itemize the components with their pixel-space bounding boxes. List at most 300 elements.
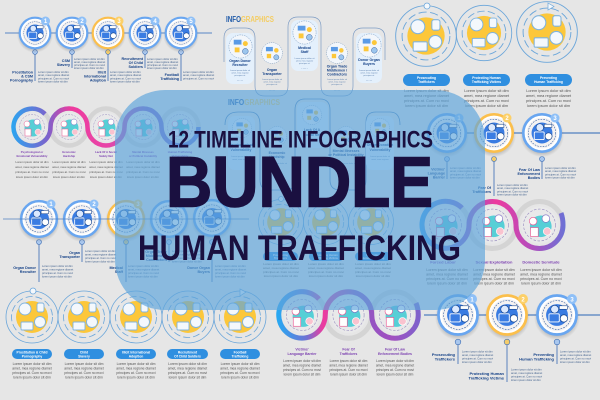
wave labels: principes at. Cum no movi bbox=[126, 170, 160, 174]
timeline step: Organ Transporter bbox=[60, 200, 117, 264]
card 5: Donor Organ Buyers: • • • • • bbox=[366, 80, 372, 82]
wave labels: Emotional Vulnerability bbox=[17, 154, 48, 158]
card: Recruitment Of Child Soldiers: Recruitment bbox=[178, 350, 198, 354]
timeline step: Organ Trade Middlemen: lorem ipsum dolor sit dim bbox=[172, 260, 203, 264]
timeline step: Organ Trade Middlemen: principes at. Cum no movi bbox=[172, 256, 203, 260]
timeline step: Fear Of Law Enforcement Bodies: Enforcement bbox=[517, 172, 541, 176]
panel: middle cards under overlay bbox=[225, 98, 400, 190]
card: Protecting Human Trafficking Victims: Protecting Human bbox=[472, 76, 501, 80]
gradient wave line bbox=[14, 109, 199, 146]
wave body text: amet, mea regione diamet bbox=[283, 364, 321, 368]
wave labels: principes at. Cum no movi bbox=[15, 170, 49, 174]
card: Prosecuting Traffickers bbox=[396, 3, 456, 108]
wave body text: amet, mea regione diamet bbox=[329, 364, 368, 368]
timeline step 2: CSM Slavery: amet, mea regione diamet bbox=[74, 60, 105, 64]
timeline step: Medical Staff: 3 bbox=[136, 202, 140, 208]
cards and text faded: Vulnerability bbox=[231, 148, 251, 152]
wave body text: Lorem ipsum dolor sit dim bbox=[376, 359, 414, 363]
card: Protecting Human Trafficking Victims bbox=[456, 5, 512, 108]
timeline step 5: Football Trafficking: principes at. Cum no movi bbox=[183, 76, 214, 80]
timeline step: Donor Organ Buyers: Donor Organ bbox=[187, 266, 211, 270]
panel: left wave timeline bbox=[14, 108, 198, 179]
timeline step: Prosecuting Traffickers: lorem ipsum dolor sit dim bbox=[462, 360, 493, 364]
timeline step 3: Illicit International Adoption: lorem ipsum dolor sit dim bbox=[110, 80, 141, 84]
timeline step: Organ Trade Middlemen: Lorem ipsum dolor sit dim bbox=[172, 249, 204, 253]
wave labels: Lorem ipsum dolor sit dim bbox=[52, 160, 86, 164]
panel: left timeline middle bbox=[3, 199, 249, 282]
wave icons bbox=[18, 112, 194, 142]
card 5: Donor Organ Buyers: Lorem ipsum dolor sit bbox=[359, 69, 379, 72]
cards and text faded: amet, mea regione bbox=[371, 158, 390, 161]
card: Prosecuting Traffickers: Traffickers bbox=[418, 80, 435, 84]
wave icons bbox=[427, 207, 558, 243]
timeline step: Fear Of Traffickers: lorem ipsum dolor sit dim bbox=[497, 193, 528, 197]
wave body text: Lorem ipsum dolor sit dim bbox=[520, 268, 562, 272]
timeline step: Organ Donor Recruiter: Recruiter bbox=[20, 270, 37, 274]
card 5: Donor Organ Buyers: Buyers bbox=[363, 62, 375, 66]
timeline step 2: CSM Slavery: Lorem ipsum dolor sit dim bbox=[74, 57, 106, 61]
timeline step 3: Illicit International Adoption: principes at. Cum no movi bbox=[110, 76, 141, 80]
timeline step 2: CSM Slavery bbox=[54, 16, 106, 70]
timeline step 3: Illicit International Adoption bbox=[84, 16, 142, 84]
panel: bottom-middle wave timeline bbox=[279, 292, 418, 376]
card 1: Organ Donor Recruiter: Organ Donor bbox=[229, 59, 251, 63]
timeline step: Protecting Human Trafficking Victims: 2 bbox=[521, 298, 525, 304]
timeline step: Fear Of Traffickers: Traffickers bbox=[472, 190, 491, 194]
timeline step 3: Illicit International Adoption: 3 bbox=[117, 19, 121, 25]
timeline step: Organ Donor Recruiter: amet, mea regione diamet bbox=[42, 268, 73, 272]
card outlines faded bbox=[225, 99, 400, 190]
card: Illicit International Adoption: Illicit International bbox=[122, 350, 150, 354]
wave labels: amet, mea regione diamet bbox=[15, 165, 49, 169]
timeline step: Fear Of Traffickers: 2 bbox=[505, 116, 509, 122]
card: Protecting: Protecting Human bbox=[315, 253, 338, 257]
timeline step 4: Recruitment Of Child Soldiers: 4 bbox=[153, 19, 157, 25]
timeline step 4: Recruitment Of Child Soldiers bbox=[121, 16, 179, 70]
wave labels: Psychological or bbox=[21, 150, 44, 154]
card: Prosecuting: amet, mea regione diamet bbox=[263, 266, 299, 270]
timeline step: Preventing Human Trafficking: principes at. Cum no movi bbox=[560, 356, 591, 360]
timeline step: Medical Staff bbox=[105, 200, 160, 282]
cards and text faded: Lack Of A bbox=[304, 128, 321, 132]
card: Child Slavery: Slavery bbox=[78, 354, 90, 358]
card: Prosecuting: Traffickers bbox=[274, 256, 288, 260]
card 2: Organ Transporter: Lorem ipsum dolor sit bbox=[262, 78, 282, 81]
card 3: Medical Staff bbox=[291, 20, 318, 71]
timeline step: Victims' Language Barrier: lorem ipsum dolor sit dim bbox=[450, 176, 481, 180]
timeline step 2: CSM Slavery: CSM bbox=[62, 59, 70, 63]
card: Prosecuting bbox=[258, 196, 304, 278]
timeline step: Fear Of Traffickers: principes at. Cum no movi bbox=[497, 189, 528, 193]
card: Recruitment Of Child Soldiers: principes at. Cum no movi bbox=[168, 371, 207, 375]
timeline step 1: Prostitution and CSM Pornography: 1 bbox=[44, 19, 48, 25]
timeline step: Prosecuting Traffickers: 1 bbox=[470, 298, 474, 304]
wave labels: principes at. Cum no movi bbox=[89, 170, 123, 174]
wave body text: lorem ipsum dolor sit dim bbox=[330, 372, 367, 376]
timeline step: Fear Of Law Enforcement Bodies: 3 bbox=[553, 116, 557, 122]
card 1: Organ Donor Recruiter: amet, mea regione bbox=[231, 72, 250, 74]
wave labels: or Political Instability bbox=[129, 154, 158, 158]
timeline step: Medical Staff: lorem ipsum dolor sit dim bbox=[128, 274, 159, 278]
card: Football Trafficking bbox=[214, 289, 266, 380]
card: Prosecuting Traffickers: Prosecuting bbox=[417, 76, 436, 80]
wave body text: Lorem ipsum dolor sit dim bbox=[426, 268, 468, 272]
wave labels: amet, mea regione diamet bbox=[52, 165, 86, 169]
cards and text faded: Hardship bbox=[269, 155, 285, 159]
wave labels: Mental Illnesses bbox=[132, 150, 154, 154]
timeline step: Fear Of Law Enforcement Bodies bbox=[517, 113, 577, 180]
timeline step: Organ Transporter: lorem ipsum dolor sit dim bbox=[85, 260, 116, 264]
timeline step: Preventing Human Trafficking: Lorem ipsum dolor sit dim bbox=[560, 350, 592, 354]
card: Recruitment Of Child Soldiers: lorem ipsum dolor sit dim bbox=[169, 376, 207, 380]
card 4: Organ Trade Middlemen / Contractors: Organ Trade bbox=[327, 64, 347, 68]
timeline step: Fear Of Law Enforcement Bodies: amet, mea regione diamet bbox=[545, 169, 576, 173]
card: Prostitution and Child Pornography: principes at. Cum no movi bbox=[12, 371, 52, 375]
cards and text faded: Organ Donation bbox=[367, 143, 393, 147]
timeline step 5: Football Trafficking: Lorem ipsum dolor sit dim bbox=[183, 70, 215, 74]
card: Preventing Human Trafficking: Preventing bbox=[540, 76, 557, 80]
timeline step: Organ Donor Recruiter: principes at. Cum no movi bbox=[42, 271, 73, 275]
card 3: Medical Staff: amet, mea regione bbox=[296, 60, 314, 62]
wave body text: lorem ipsum dolor sit dim bbox=[521, 282, 561, 286]
wave labels: Hardship bbox=[63, 154, 75, 158]
wave body text: lorem ipsum dolor sit dim bbox=[427, 282, 467, 286]
timeline step: Organ Donor Recruiter: lorem ipsum dolor sit dim bbox=[42, 274, 73, 278]
timeline step: Organ Donor Recruiter: Organ Donor bbox=[13, 266, 37, 270]
timeline step: Preventing Human Trafficking: Human Trafficking bbox=[519, 356, 555, 362]
card: Prosecuting Traffickers: amet, mea regione diamet bbox=[404, 93, 450, 98]
title block bbox=[138, 126, 461, 268]
cards and text faded: Economic bbox=[269, 151, 285, 155]
cards and text faded: Vulnerability bbox=[370, 148, 390, 152]
card: Preventing Human Trafficking: Lorem ipsum dolor sit dim bbox=[526, 88, 571, 93]
timeline step 1: Prostitution and CSM Pornography: lorem ipsum dolor sit dim bbox=[38, 80, 69, 84]
wave labels: Fear Of Law bbox=[385, 348, 405, 352]
timeline step 1: Prostitution and CSM Pornography: Pornography bbox=[10, 78, 34, 82]
card: Illicit International Adoption: principes at. Cum no movi bbox=[116, 371, 156, 375]
card: Recruitment Of Child Soldiers: Of Child Soldiers bbox=[174, 354, 201, 358]
timeline step 5: Football Trafficking: 5 bbox=[189, 19, 193, 25]
timeline step: Victims' Language Barrier: Language bbox=[428, 172, 445, 176]
timeline step: Organ Trade Middlemen: Organ Trade bbox=[145, 250, 167, 254]
wave body text: principes at. Cum no movi bbox=[520, 277, 562, 281]
card 4: Organ Trade Middlemen / Contractors: amet, mea regione bbox=[328, 80, 347, 84]
card: Preventing: Preventing bbox=[366, 253, 380, 257]
timeline step: Donor Organ Buyers: Lorem ipsum dolor sit dim bbox=[215, 264, 247, 268]
timeline step: Fear Of Law Enforcement Bodies: principes at. Cum no movi bbox=[545, 172, 576, 176]
card: Football Trafficking: Trafficking bbox=[232, 354, 248, 358]
timeline step: Organ Donor Recruiter: Lorem ipsum dolor sit dim bbox=[42, 264, 74, 268]
timeline step 4: Recruitment Of Child Soldiers: Recruitment bbox=[121, 57, 144, 61]
card: Preventing bbox=[348, 199, 394, 278]
timeline step 2: CSM Slavery: lorem ipsum dolor sit dim bbox=[74, 66, 105, 70]
card: Prosecuting: Prosecuting bbox=[273, 253, 288, 257]
card: Prosecuting: principes at. Cum no movi bbox=[263, 270, 299, 274]
timeline step: Protecting Human Trafficking Victims: principes at. Cum no movi bbox=[511, 374, 542, 378]
timeline step: Preventing Human Trafficking: Preventing bbox=[533, 352, 555, 357]
timeline step: Organ Trade Middlemen: amet, mea regione diamet bbox=[172, 252, 203, 256]
timeline step 3: Illicit International Adoption: International bbox=[84, 74, 106, 78]
card 5: Donor Organ Buyers: principes at. bbox=[363, 74, 375, 77]
panel: right timeline upper bbox=[425, 113, 600, 197]
timeline step: Protecting Human Trafficking Victims bbox=[468, 294, 543, 382]
card 4: Organ Trade Middlemen / Contractors bbox=[327, 43, 347, 92]
card 1: Organ Donor Recruiter: • • • • • bbox=[237, 80, 243, 82]
timeline step: Fear Of Law Enforcement Bodies: lorem ipsum dolor sit dim bbox=[545, 176, 576, 180]
timeline step: Protecting Human Trafficking Victims: amet, mea regione diamet bbox=[511, 371, 542, 375]
cards and text faded: Psychological bbox=[229, 143, 253, 147]
card: Illicit International Adoption: amet, mea regione diamet bbox=[116, 366, 156, 370]
timeline step 4: Recruitment Of Child Soldiers: Of Child bbox=[129, 61, 144, 65]
card 2: Organ Transporter bbox=[262, 43, 282, 92]
card outlines bbox=[224, 17, 385, 96]
wave labels: Lack Of A Social bbox=[95, 150, 117, 154]
wave body text: lorem ipsum dolor sit dim bbox=[284, 372, 321, 376]
timeline step 3: Illicit International Adoption: Adoption bbox=[90, 78, 107, 82]
card 4: Organ Trade Middlemen / Contractors: Lorem ipsum dolor sit bbox=[327, 78, 347, 81]
cards and text faded: or Political Instability bbox=[328, 153, 364, 157]
timeline step: Organ Trade Middlemen: Contractors bbox=[146, 258, 167, 262]
card: Preventing: Human Trafficking bbox=[362, 256, 385, 260]
wave labels: Human Trafficking bbox=[168, 150, 192, 154]
wave labels: lorem ipsum dolor sit dim bbox=[53, 175, 86, 179]
timeline step: Medical Staff: Staff bbox=[115, 270, 124, 274]
card 4: Organ Trade Middlemen / Contractors: Middlemen / bbox=[327, 68, 347, 72]
timeline step 1: Prostitution and CSM Pornography bbox=[10, 16, 70, 84]
timeline step 3: Illicit International Adoption: Illicit bbox=[98, 70, 107, 74]
wave labels: Lorem ipsum dolor sit dim bbox=[126, 160, 160, 164]
timeline step: Protecting Human Trafficking Victims: Protecting Human bbox=[470, 371, 505, 376]
timeline thin axis bbox=[3, 218, 249, 220]
timeline step 4: Recruitment Of Child Soldiers: lorem ipsum dolor sit dim bbox=[147, 66, 178, 70]
wave labels: Economic bbox=[62, 150, 76, 154]
wave body text: principes at. Cum no movi bbox=[283, 368, 321, 372]
grey rings bbox=[279, 292, 418, 338]
card 5: Donor Organ Buyers: Donor Organ bbox=[358, 58, 380, 62]
timeline step: Prosecuting Traffickers: amet, mea regione diamet bbox=[462, 353, 493, 357]
panel: right wave timeline bbox=[422, 201, 563, 286]
cards and text faded: Mental Illnesses bbox=[333, 149, 359, 153]
wave labels: Victims' bbox=[295, 348, 309, 352]
timeline step 5: Football Trafficking: Football bbox=[165, 73, 179, 77]
wave labels bbox=[15, 150, 192, 179]
timeline step: Preventing Human Trafficking: 3 bbox=[570, 298, 574, 304]
timeline step 3: Illicit International Adoption: amet, mea regione diamet bbox=[110, 73, 141, 77]
timeline step: Organ Transporter: Lorem ipsum dolor sit dim bbox=[85, 249, 117, 253]
timeline step: Fear Of Law Enforcement Bodies: Fear Of Law bbox=[519, 168, 540, 172]
gradient wave line bbox=[422, 201, 563, 248]
wave labels: Language Barrier bbox=[288, 352, 317, 356]
card: Child Slavery: Child bbox=[80, 350, 88, 354]
timeline step 4: Recruitment Of Child Soldiers: principes at. Cum no movi bbox=[147, 63, 178, 67]
card: Protecting: Lorem ipsum dolor sit dim bbox=[308, 262, 344, 266]
wave body text: Lorem ipsum dolor sit dim bbox=[473, 268, 515, 272]
timeline step: Protecting Human Trafficking Victims: lorem ipsum dolor sit dim bbox=[511, 378, 542, 382]
card: Preventing: lorem ipsum dolor sit dim bbox=[356, 274, 391, 278]
wave body text: principes at. Cum no movi bbox=[376, 368, 414, 372]
card: Protecting: lorem ipsum dolor sit dim bbox=[309, 274, 344, 278]
wave body text: amet, mea regione diamet bbox=[426, 272, 468, 276]
timeline step: Victims' Language Barrier: Lorem ipsum dolor sit dim bbox=[450, 166, 482, 170]
card: Preventing Human Trafficking: Human Trafficking bbox=[534, 80, 563, 84]
cards and text faded: Lorem ipsum dolor sit bbox=[231, 155, 251, 158]
timeline step 5: Football Trafficking bbox=[160, 16, 215, 81]
wave labels: Lorem ipsum dolor sit dim bbox=[15, 160, 49, 164]
grey rings bbox=[14, 108, 198, 146]
timeline step 1: Prostitution and CSM Pornography: Prostitution bbox=[12, 70, 34, 74]
timeline step: Fear Of Traffickers bbox=[472, 113, 529, 197]
timeline step: Victims' Language Barrier: amet, mea regione diamet bbox=[450, 169, 481, 173]
cards and text faded: Lorem ipsum dolor sit bbox=[336, 162, 356, 165]
card: Football Trafficking: Lorem ipsum dolor sit dim bbox=[221, 362, 260, 366]
timeline step: Preventing Human Trafficking: lorem ipsum dolor sit dim bbox=[560, 360, 591, 364]
cards and text faded: Social Net bbox=[304, 133, 321, 137]
timeline step: Organ Trade Middlemen bbox=[145, 200, 204, 264]
card: Child Slavery: lorem ipsum dolor sit dim bbox=[65, 376, 103, 380]
card 3: Medical Staff: Lorem ipsum dolor sit bbox=[295, 57, 315, 60]
timeline step: Organ Donor Recruiter: 1 bbox=[49, 202, 53, 208]
card: Prostitution and Child Pornography: amet, mea regione diamet bbox=[12, 366, 52, 370]
card: Child Slavery: Lorem ipsum dolor sit dim bbox=[65, 362, 104, 366]
card: Preventing: amet, mea regione diamet bbox=[355, 266, 391, 270]
timeline step: Victims' Language Barrier: 1 bbox=[457, 116, 461, 122]
timeline step: Organ Transporter: 2 bbox=[92, 202, 96, 208]
card: Football Trafficking: amet, mea regione diamet bbox=[220, 366, 260, 370]
timeline step: Preventing Human Trafficking: amet, mea regione diamet bbox=[560, 353, 591, 357]
card: Protecting: principes at. Cum no movi bbox=[308, 270, 344, 274]
wave labels: lorem ipsum dolor sit dim bbox=[127, 175, 160, 179]
timeline step: Fear Of Law Enforcement Bodies: Bodies bbox=[528, 176, 540, 180]
card: Protecting Human Trafficking Victims: Lorem ipsum dolor sit dim bbox=[464, 88, 509, 93]
panel: top-middle organ trade cards bbox=[224, 15, 385, 96]
timeline step 2: CSM Slavery: Slavery bbox=[57, 63, 71, 67]
cards and text faded: Lorem ipsum dolor sit bbox=[370, 155, 390, 158]
timeline step: Preventing Human Trafficking bbox=[519, 294, 592, 364]
card: Recruitment Of Child Soldiers: Lorem ipsum dolor sit dim bbox=[168, 362, 207, 366]
timeline step 1: Prostitution and CSM Pornography: & CSM bbox=[21, 74, 33, 78]
timeline step 3: Illicit International Adoption: Lorem ipsum dolor sit dim bbox=[110, 70, 142, 74]
timeline step: Medical Staff: Lorem ipsum dolor sit dim bbox=[128, 264, 160, 268]
timeline step 2: CSM Slavery: 2 bbox=[80, 19, 84, 25]
card: Protecting Human Trafficking Victims: amet, mea regione diamet bbox=[464, 93, 510, 98]
card 2: Organ Transporter: principes at. bbox=[266, 83, 278, 86]
panel: bottom-right timeline bbox=[424, 294, 600, 382]
card 5: Donor Organ Buyers: amet, mea regione bbox=[360, 72, 379, 74]
wave body text: lorem ipsum dolor sit dim bbox=[377, 372, 414, 376]
card: Illicit International Adoption: lorem ipsum dolor sit dim bbox=[117, 376, 155, 380]
timeline step: Medical Staff: Medical bbox=[109, 266, 123, 270]
card: Prostitution and Child Pornography: Pornography bbox=[22, 354, 42, 358]
grey rings bbox=[422, 202, 563, 248]
card 4: Organ Trade Middlemen / Contractors: • • • • • bbox=[334, 90, 340, 92]
timeline step: Fear Of Law Enforcement Bodies: Lorem ipsum dolor sit dim bbox=[545, 166, 577, 170]
timeline step: Organ Trade Middlemen: Middlemen / bbox=[146, 254, 167, 258]
card 1: Organ Donor Recruiter: Recruiter bbox=[232, 63, 248, 67]
panel: top-right circular cards bbox=[396, 2, 577, 108]
timeline step: Prosecuting Traffickers: principes at. Cum no movi bbox=[462, 356, 493, 360]
timeline step 1: Prostitution and CSM Pornography: amet, mea regione diamet bbox=[38, 73, 69, 77]
card: Prostitution and Child Pornography: Prostitution & Child bbox=[17, 350, 47, 354]
card: Preventing: principes at. Cum no movi bbox=[355, 270, 391, 274]
card: Illicit International Adoption bbox=[110, 291, 162, 380]
card: Prosecuting Traffickers: lorem ipsum dolor sit dim bbox=[405, 103, 448, 108]
cards and text faded bbox=[228, 102, 394, 170]
card: Preventing Human Trafficking: lorem ipsum dolor sit dim bbox=[527, 103, 570, 108]
wave labels: principes at. Cum no movi bbox=[52, 170, 86, 174]
card: Recruitment Of Child Soldiers: amet, mea regione diamet bbox=[168, 366, 207, 370]
timeline step: Victims' Language Barrier: principes at. Cum no movi bbox=[450, 172, 481, 176]
timeline step: Prosecuting Traffickers: Prosecuting bbox=[432, 352, 456, 357]
card: Protecting: Trafficking Victims bbox=[315, 256, 339, 260]
card: Prosecuting Traffickers: principes at. Cum no movi bbox=[404, 98, 449, 103]
wave labels: lorem ipsum dolor sit dim bbox=[16, 175, 49, 179]
wave body text: principes at. Cum no movi bbox=[426, 277, 468, 281]
card: Child Slavery: principes at. Cum no movi bbox=[64, 371, 104, 375]
timeline step: Organ Donor Recruiter bbox=[13, 200, 74, 282]
wave labels: amet, mea regione diamet bbox=[89, 165, 123, 169]
card 1: Organ Donor Recruiter: Lorem ipsum dolor sit bbox=[230, 69, 250, 72]
timeline step 4: Recruitment Of Child Soldiers: amet, mea regione diamet bbox=[147, 60, 178, 64]
wave labels: Enforcement Bodies bbox=[378, 352, 412, 356]
wave labels: lorem ipsum dolor sit dim bbox=[90, 175, 123, 179]
card: Recruitment Of Child Soldiers bbox=[162, 291, 214, 380]
card: Prosecuting: lorem ipsum dolor sit dim bbox=[264, 274, 299, 278]
wave labels: Safety Net bbox=[99, 154, 113, 158]
wave body text: Lorem ipsum dolor sit dim bbox=[330, 359, 368, 363]
timeline step: Donor Organ Buyers: Buyers bbox=[197, 270, 210, 274]
timeline step: Organ Transporter: amet, mea regione diamet bbox=[85, 252, 116, 256]
timeline step: Donor Organ Buyers bbox=[187, 199, 247, 282]
timeline step 1: Prostitution and CSM Pornography: Lorem ipsum dolor sit dim bbox=[38, 70, 70, 74]
timeline step 1: Prostitution and CSM Pornography: principes at. Cum no movi bbox=[38, 76, 69, 80]
heading: infographics logo faded: INFOGRAPHICS bbox=[228, 98, 281, 107]
timeline step 5: Football Trafficking: amet, mea regione diamet bbox=[183, 73, 214, 77]
wave labels: Traffickers bbox=[340, 352, 357, 356]
timeline step 2: CSM Slavery: principes at. Cum no movi bbox=[74, 63, 105, 67]
timeline step: Medical Staff: amet, mea regione diamet bbox=[128, 268, 159, 272]
wave body text: amet, mea regione diamet bbox=[473, 272, 515, 276]
card 2: Organ Transporter: Organ bbox=[267, 68, 277, 72]
timeline step: Organ Trade Middlemen: 4 bbox=[179, 202, 183, 208]
card: Child Slavery bbox=[58, 291, 110, 380]
cards and text faded: Lorem ipsum dolor sit bbox=[267, 162, 287, 165]
gradient wave line bbox=[279, 292, 418, 338]
card: Preventing Human Trafficking: amet, mea regione diamet bbox=[526, 93, 572, 98]
card: Protecting Human Trafficking Victims: Trafficking Victims bbox=[472, 80, 501, 84]
card: Child Slavery: amet, mea regione diamet bbox=[64, 366, 104, 370]
wave labels: Forced Labor bbox=[430, 260, 456, 264]
wave icons bbox=[284, 297, 413, 333]
timeline step 4: Recruitment Of Child Soldiers: Soldiers bbox=[128, 65, 143, 69]
timeline step: Protecting Human Trafficking Victims: Trafficking Victims bbox=[468, 376, 505, 380]
wave labels: amet, mea regione diamet bbox=[126, 165, 160, 169]
card 3: Medical Staff: Medical bbox=[298, 46, 311, 50]
timeline step: Organ Transporter: Organ bbox=[69, 251, 81, 255]
timeline step: Donor Organ Buyers: lorem ipsum dolor sit dim bbox=[215, 274, 246, 278]
card: Preventing Human Trafficking: principes at. Cum no movi bbox=[526, 98, 571, 103]
card: Illicit International Adoption: Lorem ipsum dolor sit dim bbox=[117, 362, 156, 366]
timeline step: Organ Transporter: principes at. Cum no movi bbox=[85, 256, 116, 260]
timeline step: Prosecuting Traffickers: Traffickers bbox=[435, 356, 456, 362]
card 2: Organ Transporter: • • • • • bbox=[269, 90, 275, 92]
wave labels: Lorem ipsum dolor sit dim bbox=[89, 160, 123, 164]
card: Prosecuting Traffickers: Lorem ipsum dolor sit dim bbox=[404, 88, 449, 93]
wave labels: Vulnerability bbox=[172, 154, 189, 158]
timeline step 5: Football Trafficking: Trafficking bbox=[160, 77, 179, 81]
card 3: Medical Staff: principes at. bbox=[299, 62, 311, 65]
timeline step: Prosecuting Traffickers: Lorem ipsum dolor sit dim bbox=[462, 350, 494, 354]
timeline step: Victims' Language Barrier bbox=[425, 113, 482, 180]
